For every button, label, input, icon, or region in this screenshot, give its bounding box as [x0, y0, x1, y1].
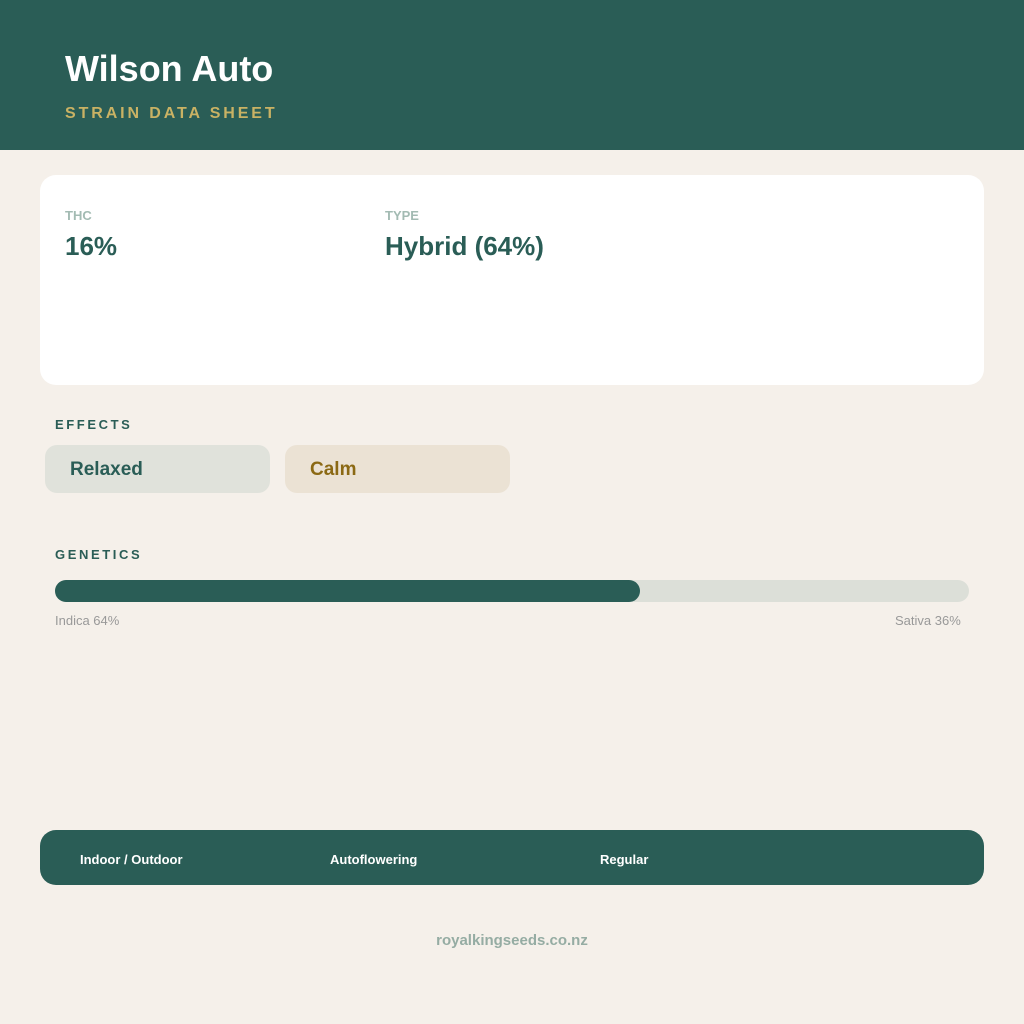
- cultivation: Indoor / Outdoor: [80, 852, 183, 867]
- effect tag: Relaxed: Relaxed: [70, 459, 143, 480]
- type label: TYPE: [385, 208, 419, 223]
- seed type: Regular: [600, 852, 648, 867]
- effect tag: Calm: Calm: [310, 459, 356, 480]
- panel: stats card: [40, 175, 984, 385]
- effect tag: Calm: [285, 445, 510, 493]
- THC value: 16%: [65, 231, 117, 261]
- flowering: Autoflowering: [330, 852, 417, 867]
- effect tag: Relaxed: [45, 445, 270, 493]
- indica fill: [55, 580, 640, 602]
- header band: [0, 0, 1024, 150]
- effects heading: EFFECTS: [55, 417, 132, 432]
- footer bar: [40, 830, 984, 885]
- indica label: Indica 64%: [55, 613, 119, 628]
- THC label: THC: [65, 208, 92, 223]
- title: Wilson Auto: [65, 48, 273, 89]
- website: royalkingseeds.co.nz: [436, 932, 588, 949]
- subtitle: STRAIN DATA SHEET: [65, 105, 278, 122]
- genetics bar: [55, 580, 969, 602]
- type value: Hybrid (64%): [385, 231, 544, 261]
- sativa label: Sativa 36%: [895, 613, 961, 628]
- genetics heading: GENETICS: [55, 547, 142, 562]
